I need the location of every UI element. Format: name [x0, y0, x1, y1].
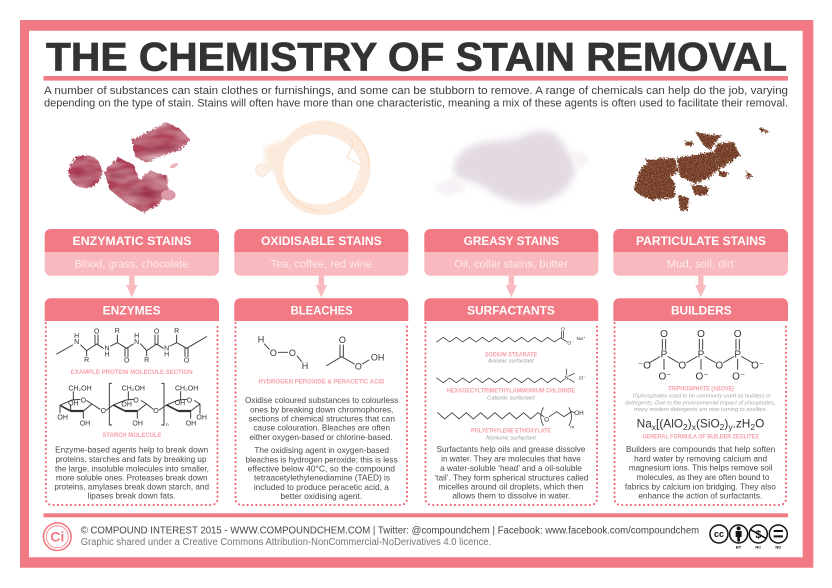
- chemical diagram: triphosphate: O⁻: [658, 371, 672, 382]
- panel: bleaches: [234, 298, 408, 505]
- panel heading: builders: BUILDERS: [671, 305, 732, 318]
- chemical diagram: triphosphate: O: [697, 329, 705, 340]
- caption: sodium stearate: Anionic surfactant: [487, 359, 534, 365]
- body text: builders: magnesium ions. This helps remove soil: [629, 463, 773, 473]
- body text: bleaches: either oxygen-based or chlorine-based.: [249, 432, 393, 442]
- column 4: particulate stains: [613, 229, 788, 298]
- body text: bleaches: sections of chemical structures that can: [248, 413, 395, 423]
- chemical diagram: protein: R: [144, 357, 149, 364]
- chemical diagram: protein: O: [154, 328, 160, 335]
- chemical diagram: starch: n: [166, 422, 169, 428]
- panel heading: enzymes: ENZYMES: [103, 305, 161, 318]
- stain header: greasy: [424, 229, 598, 252]
- body text: bleaches: cause colouration. Bleaches are often: [253, 423, 390, 433]
- body text: enzymes: more soluble ones. Proteases break down: [56, 473, 208, 483]
- chemical diagram: hydrogen peroxide and peracetic acid: H: [258, 335, 264, 345]
- chemical diagram: polyethylene ethoxylate: O: [544, 416, 549, 423]
- body text: enzymes: Enzyme-based agents help to break down: [55, 445, 208, 455]
- body text: builders: molecules, as they are often bound to: [637, 472, 770, 482]
- chemical diagram: hydrogen peroxide and peracetic acid: O: [339, 335, 346, 345]
- chemical diagram: sodium stearate: [437, 326, 586, 347]
- logo: compound interest: Ci: [50, 528, 64, 544]
- stain examples: enzymatic: Blood, grass, chocolate: [74, 259, 188, 271]
- body text: builders: fabrics by calcium ion bridging. They also: [625, 481, 776, 491]
- stain examples: oxidisable: [234, 252, 408, 276]
- stain examples: greasy: [424, 252, 598, 276]
- footer credits: [81, 526, 699, 548]
- note: phosphates: detergents. Due to the environmental impact of phosphates,: [625, 400, 776, 406]
- icon: creative commons licence badges: $: [755, 529, 761, 541]
- chemical diagram: starch: O: [101, 408, 107, 415]
- caption: hexadecyltrimethylammonium chloride: Cationic surfactant: [487, 395, 535, 401]
- title: THE CHEMISTRY OF STAIN REMOVAL: [46, 36, 787, 80]
- footer credits: Graphic shared under a Creative Commons Attribution-NonCommercial-NoDerivatives 4.0 licence.: [81, 537, 491, 548]
- panel: builders: [613, 298, 788, 505]
- note: phosphates: many modern detergents are now turning to zeolites.: [634, 407, 767, 413]
- icon: creative commons licence badges: cc: [714, 529, 724, 539]
- body text: bleaches: ones by breaking down chromophores,: [250, 404, 393, 414]
- body text: bleaches: tetraacetylethylenediamine (TAED) is: [254, 473, 390, 483]
- chemical diagram: starch: OH: [196, 415, 207, 422]
- chemical diagram: protein: [57, 328, 207, 364]
- body text: enzymes: proteins, amylases break down starch, and: [54, 481, 209, 491]
- title underline: [44, 76, 788, 81]
- chemical diagram: protein: H: [134, 333, 139, 340]
- stain examples: greasy: Oil, collar stains, butter: [454, 259, 568, 271]
- chemical diagram: starch: CH₂OH: [122, 386, 145, 393]
- body text: surfactants: a water-soluble ‘head’ and a oil-soluble: [440, 463, 582, 473]
- panel: surfactants: [424, 298, 598, 505]
- chemical diagram: hydrogen peroxide and peracetic acid: H: [302, 361, 308, 371]
- formula: builder zeolites: O: [755, 417, 764, 430]
- body text: enzymes: [54, 445, 209, 501]
- chemical diagram: sodium stearate: O: [561, 326, 565, 332]
- body text: bleaches: Oxidise coloured substances to colourless: [245, 395, 398, 405]
- image: soil pile: [634, 127, 769, 211]
- chemical diagram: protein: R: [174, 328, 179, 335]
- body text: bleaches: effective below 40°C, so the compound: [248, 463, 395, 473]
- chemical diagram: starch: OH: [121, 402, 132, 409]
- formula: builder zeolites: [(AlO: [656, 417, 683, 430]
- body text: builders: [625, 444, 776, 501]
- chemical diagram: hexadecyltrimethylammonium chloride: Cl⁻: [579, 376, 586, 382]
- chemical diagram: starch: OH: [57, 415, 68, 422]
- body text: enzymes: proteins, starches and fats by breaking up: [55, 454, 207, 464]
- stain examples: enzymatic: [45, 252, 219, 276]
- chemical diagram: protein: R: [84, 357, 89, 364]
- chemical diagram: triphosphate: P: [698, 350, 705, 361]
- arrow: particulate to builders: [695, 276, 706, 298]
- body text: surfactants: micelles around oil droplets, which then: [438, 481, 584, 491]
- chemical diagram: starch: O: [133, 397, 139, 404]
- stain header: oxidisable: [234, 229, 408, 252]
- panel heading: surfactants: SURFACTANTS: [467, 305, 555, 318]
- chemical diagram: triphosphate: ⁻O: [638, 361, 651, 372]
- chemical diagram: starch: OH: [175, 400, 185, 407]
- chemical diagram: protein: R: [115, 328, 120, 335]
- column 3: greasy stains: [424, 229, 598, 298]
- caption: sodium stearate: SODIUM STEARATE: [485, 352, 537, 358]
- chemical diagram: hydrogen peroxide and peracetic acid: O: [270, 348, 277, 358]
- chemical diagram: triphosphate: O: [715, 361, 723, 372]
- stain header: oxidisable: OXIDISABLE STAINS: [261, 235, 382, 248]
- chemical diagram: triphosphate: O: [660, 329, 668, 340]
- panel heading: builders: [613, 298, 788, 321]
- caption: starch: STARCH MOLECULE: [102, 433, 161, 439]
- caption: triphosphate: TRIPHOSPHATE (ABOVE): [668, 387, 734, 393]
- chemical diagram: starch: OH: [132, 420, 143, 427]
- panel heading: surfactants: [424, 298, 598, 321]
- chemical diagram: starch: CH₂OH: [68, 386, 92, 393]
- formula: builder zeolites: x: [652, 422, 657, 432]
- caption: protein: EXAMPLE PROTEIN MOLECULE SECTION: [71, 370, 193, 376]
- stain header: greasy: GREASY STAINS: [464, 235, 559, 248]
- formula: builder zeolites: Na: [637, 417, 652, 430]
- image: coffee ring stain: [256, 120, 371, 215]
- caption: sodium stearate: [485, 352, 537, 365]
- chemical diagram: protein: N: [164, 346, 169, 353]
- stain header: enzymatic: ENZYMATIC STAINS: [72, 235, 192, 248]
- panel heading: enzymes: [45, 298, 219, 321]
- chemical diagram: triphosphate: O⁻: [751, 361, 764, 372]
- icon: creative commons licence badges: [710, 525, 787, 549]
- formula: builder zeolites: 2: [683, 422, 688, 432]
- body text: bleaches: better oxidising agent.: [280, 491, 362, 501]
- chemical diagram: starch: O: [81, 398, 87, 405]
- chemical diagram: starch: CH₂OH: [175, 386, 198, 393]
- stain examples: particulate: Mud, soil, dirt: [667, 259, 734, 271]
- intro text: A number of substances can stain clothes or furnishings, and some can be stubborn to remove. A range of chemicals can help do the job, varying: [44, 85, 788, 97]
- chemical diagram: triphosphate: O: [734, 329, 742, 340]
- caption: polyethylene ethoxylate: Nonionic surfactant: [486, 436, 536, 442]
- chemical diagram: protein: H: [104, 352, 110, 359]
- panel: enzymes: [45, 298, 219, 505]
- chemical diagram: protein: N: [104, 346, 110, 353]
- footer rule: [44, 513, 788, 517]
- body text: surfactants: in water. They are molecules that have: [441, 453, 581, 463]
- caption: peroxides: HYDROGEN PEROXIDE & PERACETIC ACID: [258, 380, 385, 386]
- chemical diagram: protein: N: [74, 339, 79, 346]
- chemical diagram: triphosphate: P: [734, 350, 741, 361]
- chemical diagram: triphosphate: O⁻: [695, 371, 709, 382]
- chemical diagram: protein: O: [184, 357, 190, 364]
- intro text: depending on the type of stain. Stains will often have more than one characteristic, meaning a mix of these agents is often used to facilitate their removal.: [44, 98, 788, 110]
- chemical diagram: starch: OH: [80, 420, 90, 427]
- body text: surfactants: Surfactants help oils and grease dissolve: [436, 444, 586, 454]
- chemical diagram: polyethylene ethoxylate: m: [570, 424, 574, 430]
- chemical diagram: hydrogen peroxide and peracetic acid: O: [289, 348, 296, 358]
- chemical diagram: hydrogen peroxide and peracetic acid: OH: [371, 353, 384, 363]
- chemical diagram: triphosphate: O⁻: [732, 371, 745, 382]
- stain examples: particulate: [613, 252, 788, 276]
- chemical diagram: hydrogen peroxide and peracetic acid: [258, 335, 384, 371]
- formula: builder zeolites: 2: [750, 422, 755, 432]
- body text: enzymes: lipases break down fats.: [88, 491, 176, 501]
- body text: surfactants: ‘tail’. They form spherical structures called: [434, 472, 589, 482]
- column 2: oxidisable stains: [234, 229, 408, 298]
- chemical diagram: sodium stearate: O⁻: [567, 341, 574, 347]
- formula: builder zeolites: y: [728, 422, 733, 432]
- chemical diagram: hexadecyltrimethylammonium chloride: N: [565, 375, 569, 381]
- chemical diagram: triphosphate: P: [661, 350, 668, 361]
- chemical diagram: protein: H: [164, 352, 169, 359]
- chemical diagram: starch: OH: [186, 420, 196, 427]
- body text: builders: Builders are compounds that help soften: [626, 444, 776, 454]
- chemical diagram: sodium stearate: Na⁺: [576, 336, 586, 342]
- note: phosphates: [625, 394, 776, 413]
- chemical diagram: triphosphate: O: [678, 361, 686, 372]
- caption: hexadecyltrimethylammonium chloride: HEXADECYLTRIMETHYLAMMONIUM CHLORIDE: [447, 389, 575, 395]
- image: red wine stain: [69, 122, 191, 213]
- image: grease stain: [433, 131, 590, 204]
- arrow: oxidisable to bleaches: [316, 276, 327, 298]
- chemical diagram: protein: O: [94, 328, 100, 335]
- column 1: enzymatic stains: [45, 229, 219, 298]
- body text: surfactants: allows them to dissolve in water.: [452, 491, 570, 501]
- chemical diagram: triphosphate: [638, 329, 764, 382]
- arrow: greasy to surfactants: [506, 276, 517, 298]
- stain header: particulate: [613, 229, 788, 252]
- chemical diagram: protein: N: [134, 339, 139, 346]
- arrow: enzymatic to enzymes: [126, 276, 137, 298]
- chemical diagram: starch: O: [187, 397, 193, 404]
- logo: compound interest: [44, 523, 71, 550]
- formula: builder zeolites: ): [688, 417, 692, 430]
- intro text: [44, 85, 788, 110]
- chemical diagram: starch: OH: [68, 401, 79, 408]
- panel heading: bleaches: BLEACHES: [291, 305, 353, 318]
- formula: builder zeolites: (SiO: [696, 417, 720, 430]
- footer credits: © COMPOUND INTEREST 2015 - WWW.COMPOUNDCHEM.COM | Twitter: @compoundchem | Facebook: www.facebook.com/compoundchem: [81, 526, 699, 537]
- body text: bleaches: The oxidising agent in oxygen-based: [254, 445, 389, 455]
- body text: bleaches: included to produce peracetic acid, a: [254, 482, 389, 492]
- formula: builder zeolites: x: [692, 422, 697, 432]
- stain examples: oxidisable: Tea, coffee, red wine: [271, 259, 372, 271]
- body text: bleaches: [245, 395, 398, 501]
- stain header: enzymatic: [45, 229, 219, 252]
- caption: polyethylene ethoxylate: POLYETHYLENE ETHOXYLATE: [471, 429, 551, 435]
- body text: builders: enhance the action of surfactants.: [638, 491, 762, 501]
- chemical diagram: polyethylene ethoxylate: [438, 408, 584, 430]
- note: phosphates: Triphosphates used to be commonly used as builders in: [632, 394, 771, 400]
- chemical diagram: protein: O: [124, 357, 130, 364]
- stain header: particulate: PARTICULATE STAINS: [636, 235, 766, 248]
- caption: hexadecyltrimethylammonium chloride: [447, 389, 575, 401]
- body text: surfactants: [434, 444, 589, 501]
- chemical diagram: hydrogen peroxide and peracetic acid: O: [355, 361, 362, 371]
- body text: bleaches: bleaches is hydrogen peroxide; this is less: [246, 454, 398, 464]
- chemical diagram: polyethylene ethoxylate: OH: [574, 410, 584, 417]
- icon: creative commons licence badges: NC: [755, 544, 761, 549]
- panel heading: bleaches: [234, 298, 408, 321]
- icon: creative commons licence badges: ND: [775, 544, 781, 549]
- formula: builder zeolites: 2: [720, 422, 725, 432]
- formula: builder zeolites: ): [724, 417, 728, 430]
- icon: creative commons licence badges: BY: [736, 544, 742, 549]
- chemical diagram: hexadecyltrimethylammonium chloride: [437, 369, 586, 383]
- formula: builder zeolites: .zH: [733, 417, 750, 430]
- body text: enzymes: the large, insoluble molecules into smaller,: [55, 463, 209, 473]
- chemical diagram: starch: [57, 383, 207, 428]
- body text: builders: hard water by removing calcium and: [634, 453, 767, 463]
- caption: polyethylene ethoxylate: [471, 429, 551, 442]
- chemical diagram: protein: H: [74, 333, 79, 340]
- chemical diagram: starch: O: [153, 408, 159, 415]
- caption: zeolites: GENERAL FORMULA OF BUILDER ZEOLITES: [642, 434, 759, 440]
